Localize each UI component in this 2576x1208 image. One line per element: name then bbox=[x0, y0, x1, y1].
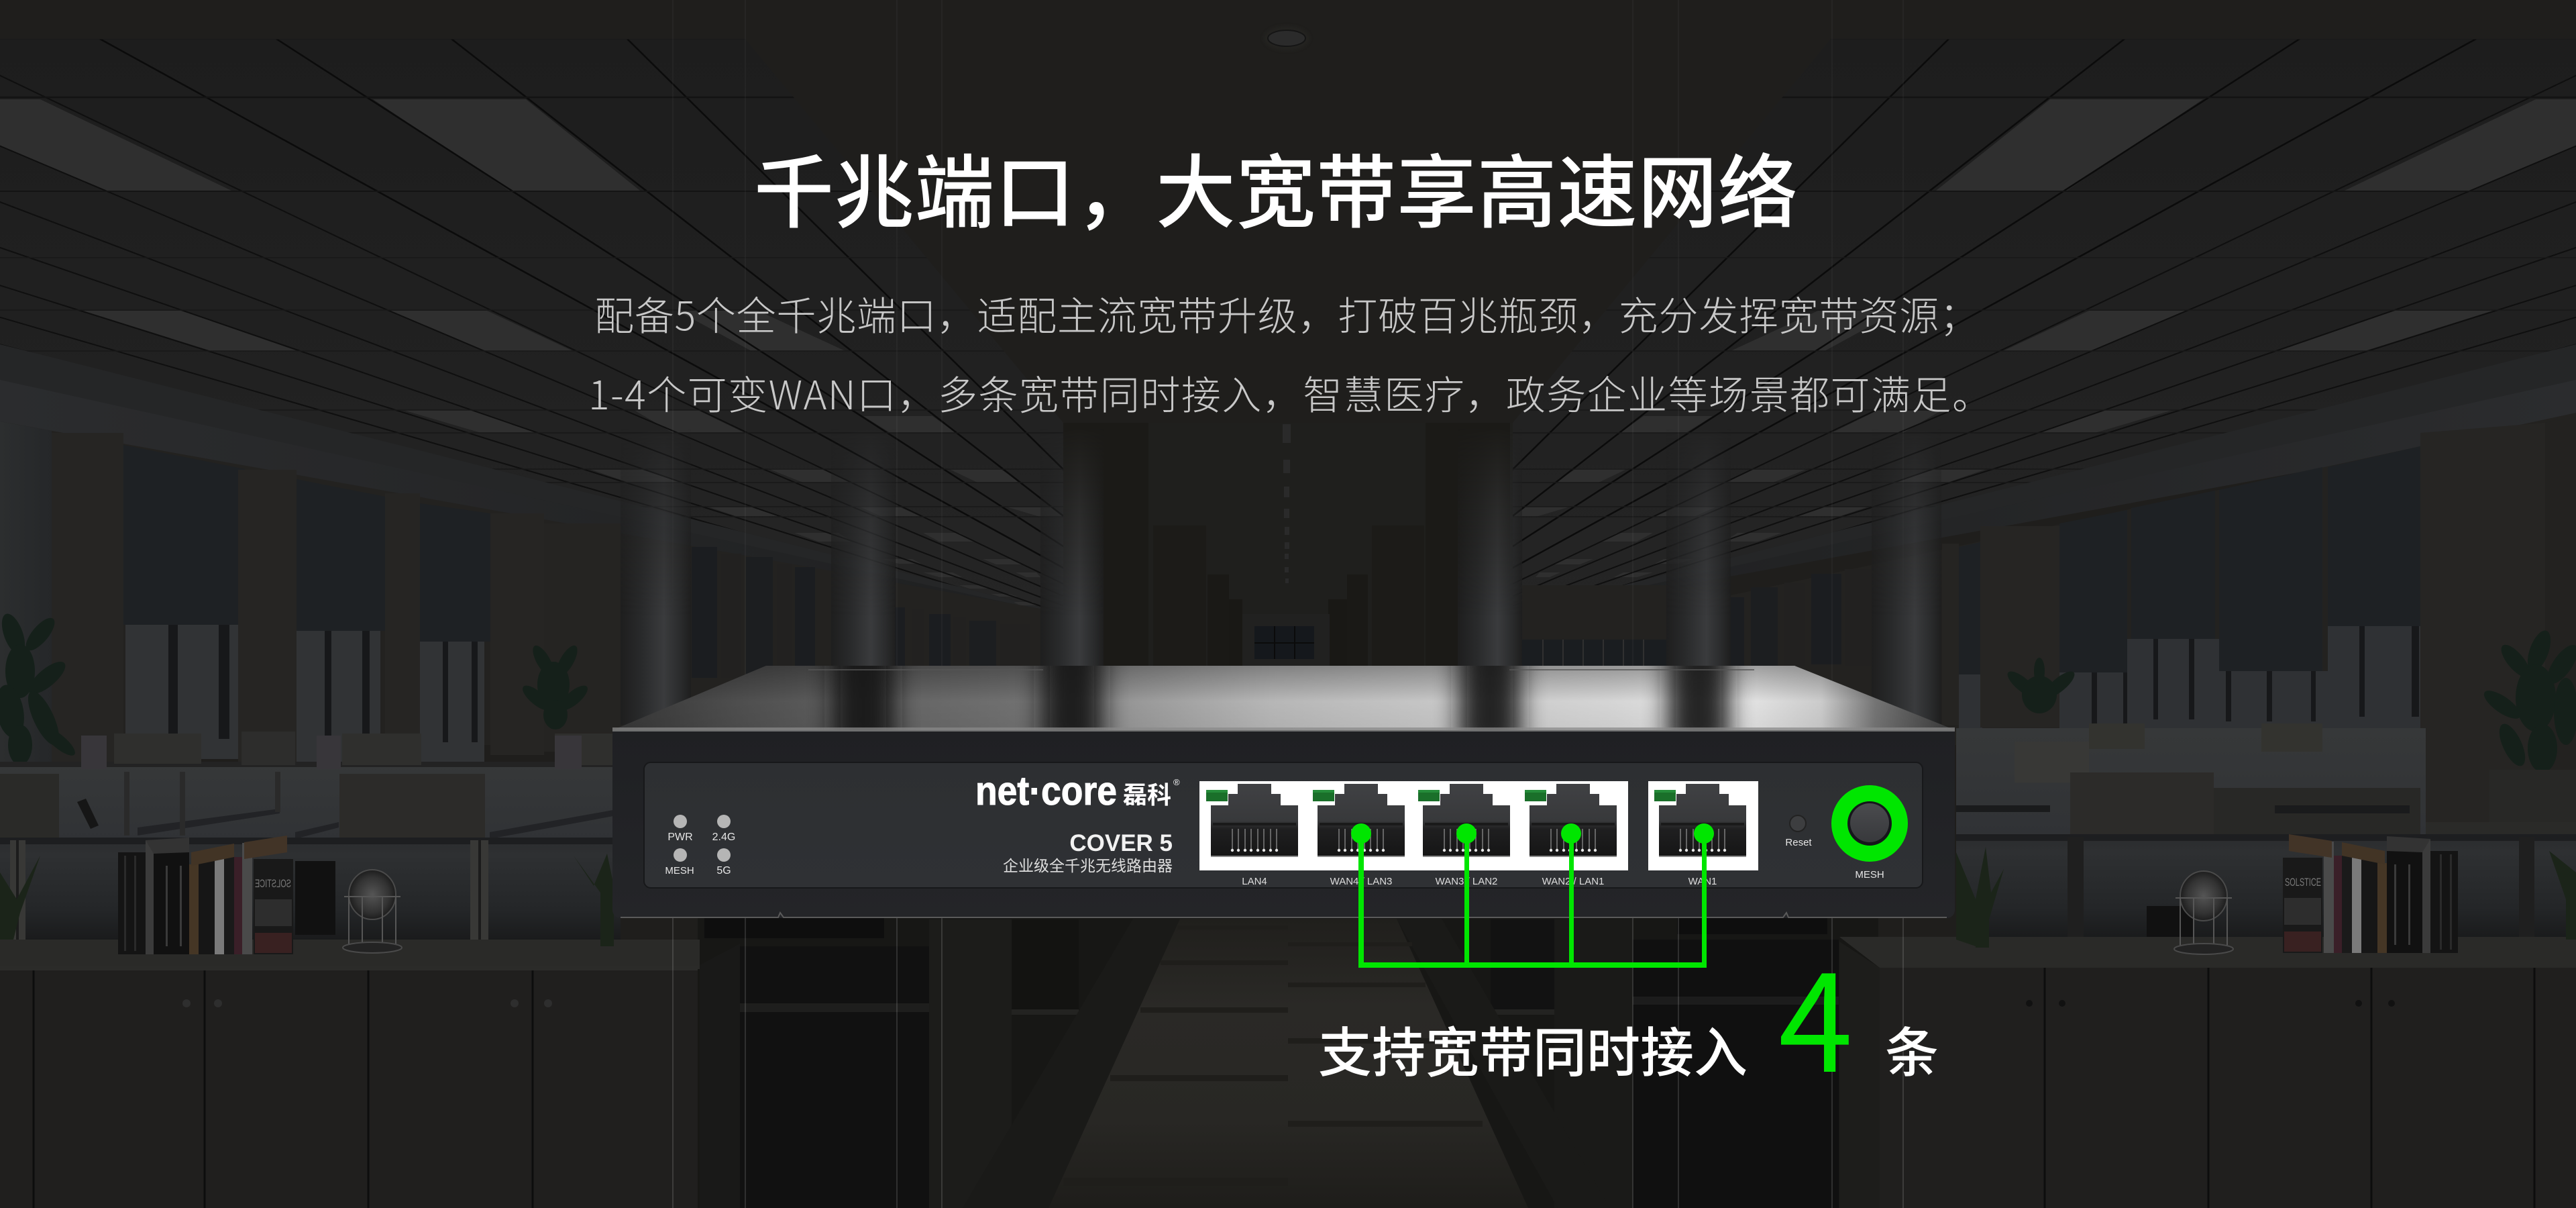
reset button bbox=[1790, 815, 1806, 832]
back wall: central corridor columns bbox=[1063, 423, 1513, 671]
port labels: WAN1 bbox=[1688, 876, 1717, 887]
ceiling: left grid and light panels bbox=[0, 39, 1288, 691]
faint vertical guide lines bbox=[673, 0, 1903, 1208]
ceiling: right grid and light panels bbox=[1288, 39, 2576, 691]
right planter box bbox=[2489, 770, 2576, 834]
counter plants bbox=[0, 847, 2576, 948]
port block: LAN and WAN/LAN bbox=[1199, 781, 1628, 870]
callout: 4 broadband lines bbox=[1318, 916, 1939, 1111]
right cabinets bbox=[1839, 937, 2576, 1208]
port labels: WAN4 / LAN3 bbox=[1330, 876, 1392, 887]
left desks and partitions bbox=[0, 732, 621, 842]
brand logo: ® bbox=[1173, 777, 1180, 787]
left glass partition bbox=[0, 838, 621, 940]
right wall: pillars, blinds and windows bbox=[1522, 413, 2576, 825]
brand logo: 磊科 bbox=[1123, 776, 1171, 811]
model description: 企业级全千兆无线路由器 bbox=[1003, 857, 1173, 874]
center corridor dark blocks bbox=[698, 918, 1878, 1208]
router: front face bbox=[612, 727, 1955, 918]
brighter guide lines below the router bbox=[673, 918, 1903, 1208]
brand logo: net·core bbox=[975, 768, 1117, 813]
router antennas bbox=[625, 454, 1938, 721]
right book cover title: SOLSTICE bbox=[2285, 876, 2321, 889]
mesh button bbox=[1831, 785, 1908, 862]
left wall: pillars, blinds and windows bbox=[0, 421, 1040, 768]
subtitle line 2: 1-4个可变WAN口，多条宽带同时接入，智慧医疗，政务企业等场景都可满足。 bbox=[588, 364, 1992, 421]
callout: 4 broadband lines: 4 bbox=[1778, 916, 1853, 1111]
LED labels: 2.4G bbox=[712, 832, 735, 843]
status LEDs bbox=[674, 815, 731, 862]
right desk globe bbox=[2174, 871, 2233, 954]
reset label: Reset bbox=[1785, 837, 1812, 848]
router: front panel bbox=[644, 762, 1923, 888]
title: 千兆端口，大宽带享高速网络 bbox=[754, 129, 1798, 244]
potted plants behind the desks bbox=[0, 611, 2576, 772]
port labels: WAN2 / LAN1 bbox=[1542, 876, 1604, 887]
port block: WAN bbox=[1648, 781, 1758, 870]
LED labels: MESH bbox=[665, 865, 694, 876]
right glass partition bbox=[1956, 834, 2576, 938]
right desks and partitions bbox=[1956, 723, 2576, 839]
corridor floor bbox=[963, 919, 1610, 1208]
port labels: WAN3 / LAN2 bbox=[1436, 876, 1497, 887]
left book cover title: SOLSTICE bbox=[255, 877, 291, 890]
green WAN connector lines bbox=[1351, 823, 1714, 968]
port labels bbox=[1242, 876, 1717, 887]
ceiling: recessed downlight bbox=[1264, 26, 1309, 50]
router: top surface with antenna shadows bbox=[619, 666, 1955, 730]
LED labels: 5G bbox=[716, 865, 731, 876]
LED labels: PWR bbox=[667, 832, 693, 843]
mesh label: MESH bbox=[1855, 869, 1884, 880]
LED labels bbox=[665, 832, 735, 876]
port labels: LAN4 bbox=[1242, 876, 1267, 887]
callout: 4 broadband lines: 条 bbox=[1885, 1010, 1939, 1088]
left cabinets bbox=[0, 940, 740, 1208]
left books on the counter bbox=[118, 836, 293, 954]
right books on the counter bbox=[2283, 834, 2458, 953]
left desk globe bbox=[343, 870, 402, 953]
model name: COVER 5 bbox=[1069, 830, 1173, 856]
subtitle line 1: 配备5个全千兆端口，适配主流宽带升级，打破百兆瓶颈，充分发挥宽带资源； bbox=[594, 285, 1979, 342]
callout: 4 broadband lines: 支持宽带同时接入 bbox=[1318, 1010, 1748, 1088]
